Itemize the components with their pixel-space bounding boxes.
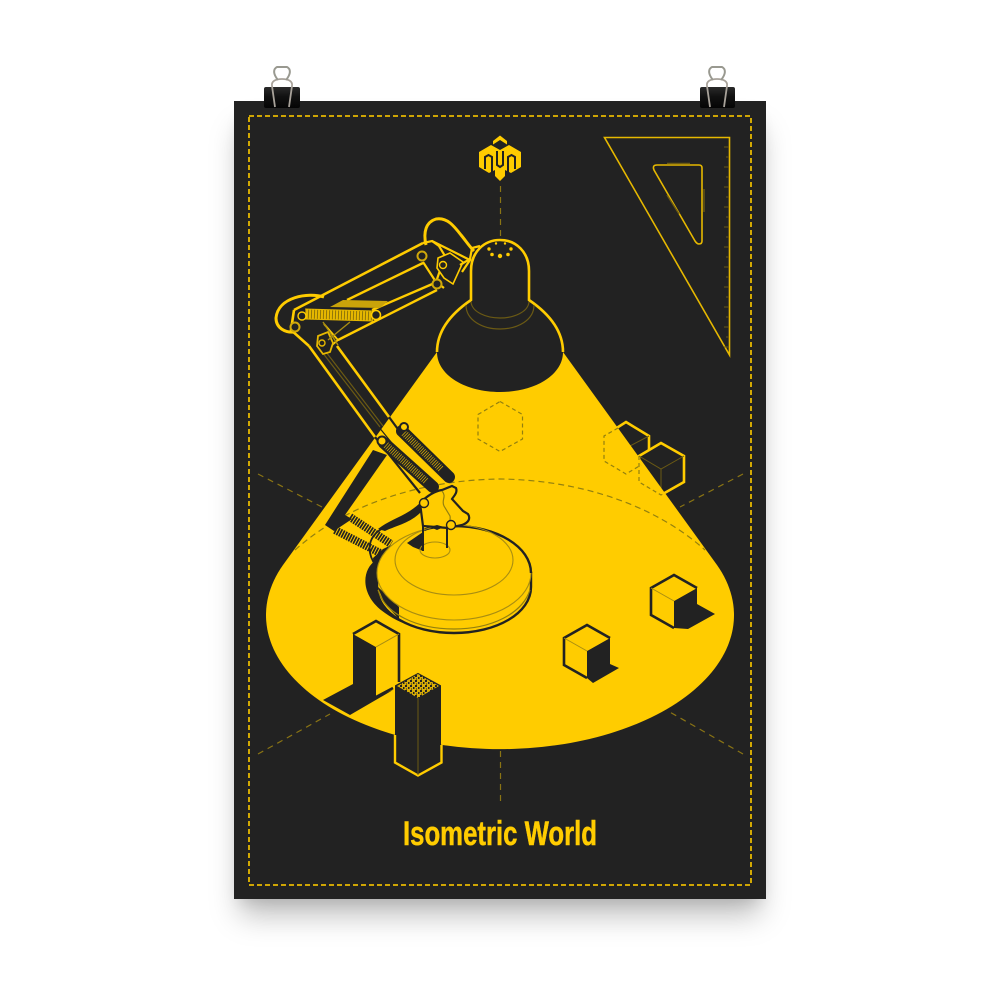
binder clip right xyxy=(700,67,735,108)
lower lamp arm on light xyxy=(375,417,420,493)
logo xyxy=(479,136,521,181)
lamp base xyxy=(377,525,531,633)
lamp shade xyxy=(437,240,563,392)
base shadow xyxy=(365,541,415,627)
small cube centre xyxy=(564,625,619,683)
title: Isometric World xyxy=(403,815,597,853)
lower hinge xyxy=(420,486,469,530)
set square ruler xyxy=(604,138,730,355)
wire loop right xyxy=(425,219,474,251)
wire loop left xyxy=(276,295,324,332)
tall pillar with shadow xyxy=(323,621,399,715)
dashed axis lines xyxy=(258,186,743,805)
binder clip left xyxy=(264,67,300,108)
lower arm springs xyxy=(378,423,449,487)
cone of light xyxy=(266,352,734,749)
upper arm spring xyxy=(290,300,388,332)
lower lamp arm in the dark xyxy=(309,346,389,437)
dashed border xyxy=(249,116,751,885)
dark cubes outside the light xyxy=(604,422,684,495)
small cube right xyxy=(651,575,715,629)
arm shadow on table xyxy=(325,450,421,566)
upper lamp arm xyxy=(291,243,437,346)
head joint xyxy=(418,241,480,288)
poster background xyxy=(234,101,766,899)
dashed hexagon outlines on light xyxy=(295,402,705,550)
elbow knob xyxy=(317,322,350,354)
dark pillar with code top xyxy=(395,674,442,776)
